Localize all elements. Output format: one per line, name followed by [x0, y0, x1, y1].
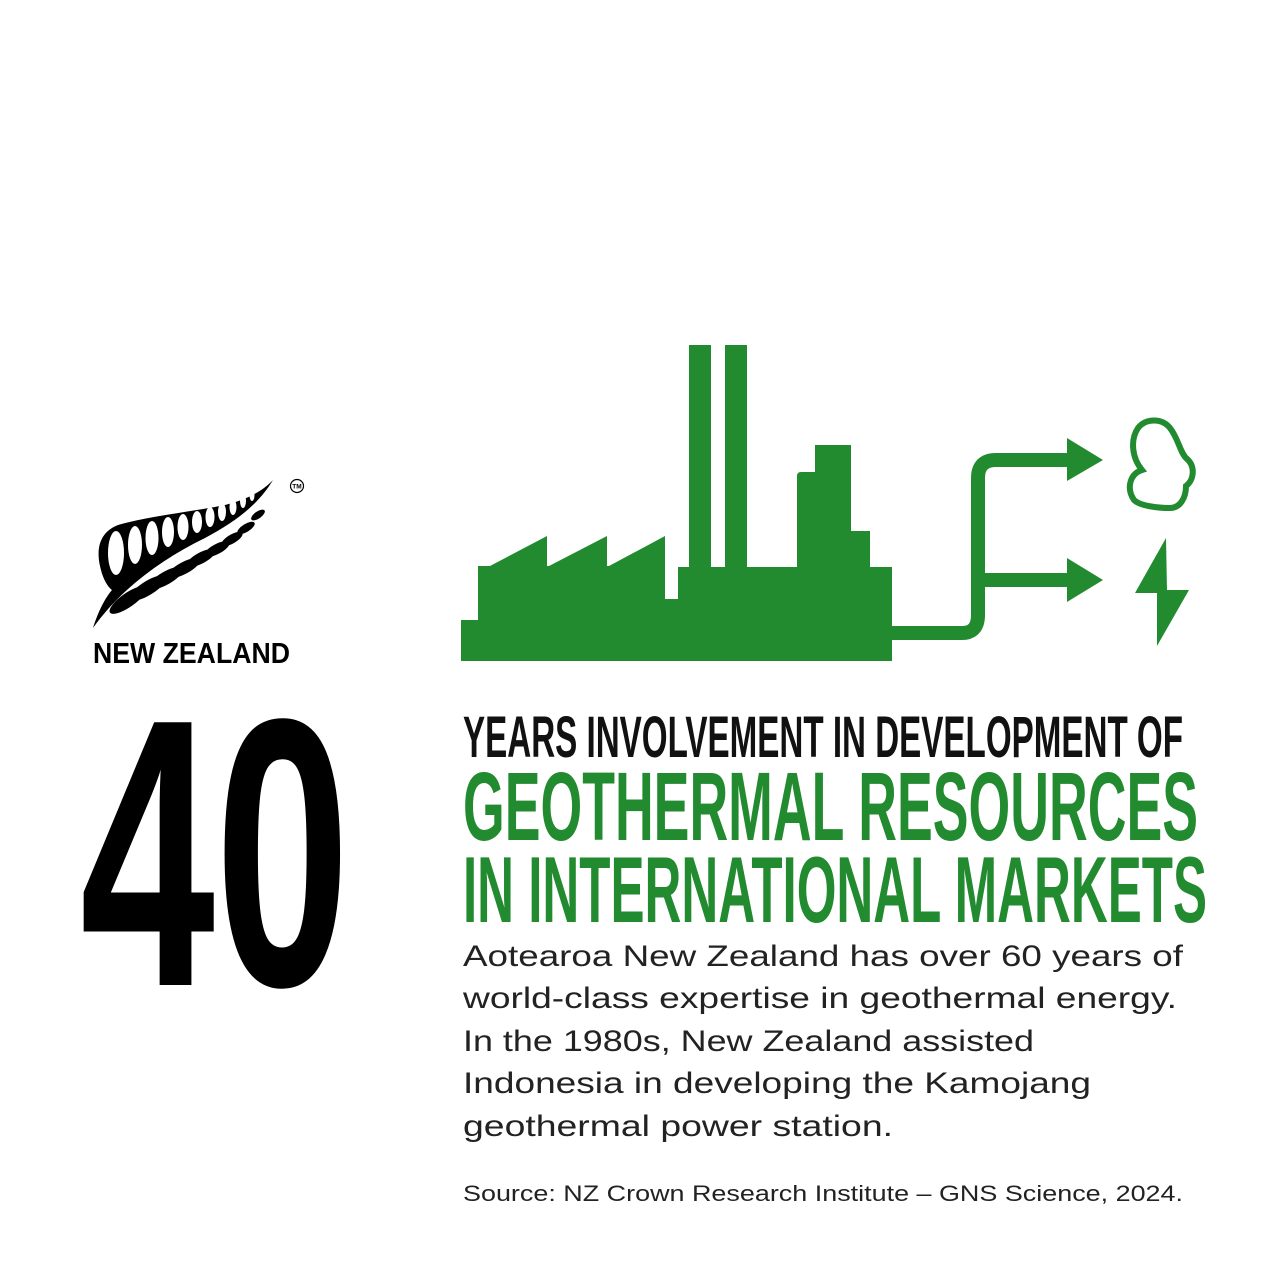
body text: In the 1980s, New Zealand assisted	[463, 1025, 1034, 1058]
icon: geothermal factory	[461, 345, 892, 661]
body text: Indonesia in developing the Kamojang	[463, 1067, 1091, 1100]
headline	[463, 705, 1207, 942]
arrow: pipe splitting to steam and electricity	[892, 438, 1103, 633]
body text: Aotearoa New Zealand has over 60 years of	[463, 940, 1184, 973]
logo text: NEW ZEALAND: NEW ZEALAND	[93, 638, 290, 670]
body text: world-class expertise in geothermal energy.	[462, 982, 1177, 1015]
logo: silver fern	[93, 480, 304, 628]
source note: Source: NZ Crown Research Institute – GNS Science, 2024.	[463, 1181, 1183, 1206]
logo: silver fern: TM	[292, 484, 302, 490]
body text: geothermal power station.	[463, 1110, 893, 1143]
big number 40: 40	[80, 639, 350, 1066]
icon: lightning bolt	[1135, 538, 1189, 646]
icon: steam cloud	[1130, 420, 1193, 508]
body text	[462, 940, 1184, 1143]
